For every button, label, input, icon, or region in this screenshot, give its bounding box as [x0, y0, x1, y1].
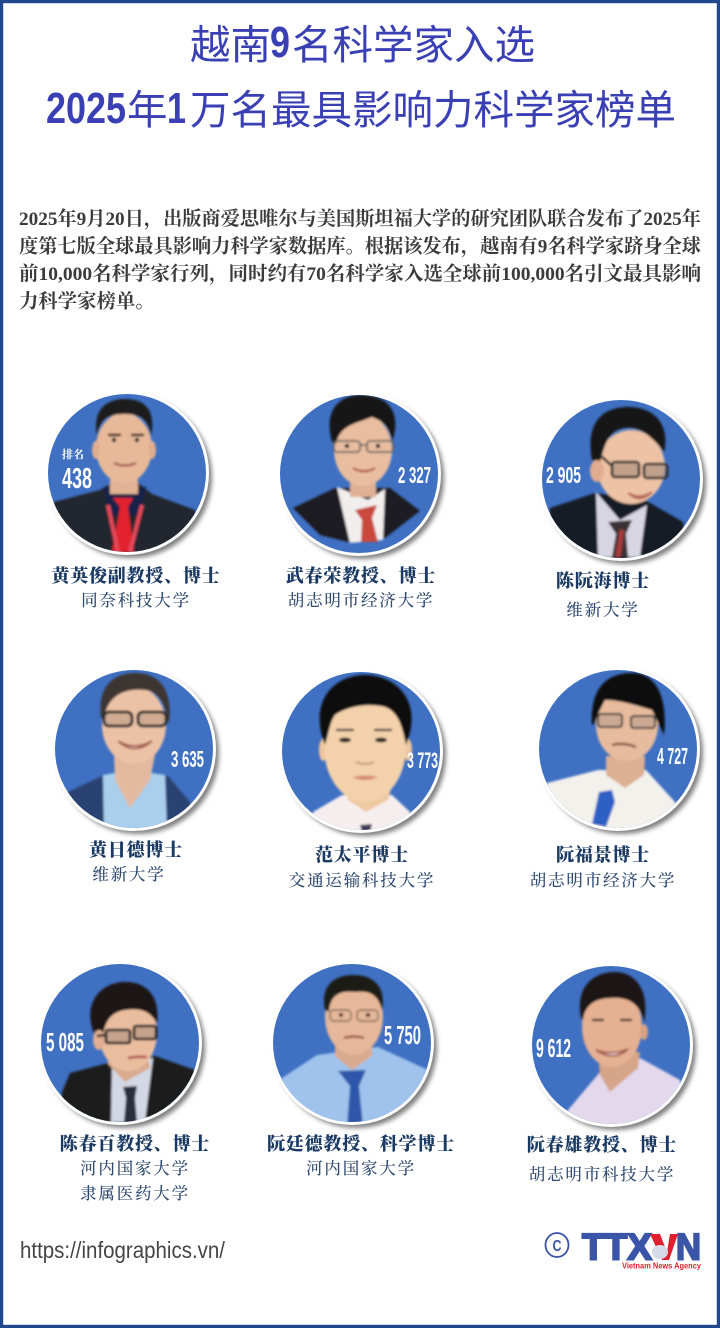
logo tagline: Vietnam News Agency [622, 1260, 701, 1270]
title [46, 18, 676, 133]
title: 名科学家入选 [292, 22, 535, 68]
rank number: 3 773 [407, 748, 438, 773]
scientist 4 name: 黄日德博士 [89, 839, 183, 860]
scientist 2 portrait [277, 392, 444, 559]
title: 2025 [46, 84, 126, 133]
scientist 8 portrait [270, 961, 437, 1130]
intro text block: 前10,000名科学家行列，同时约有70名科学家入选全球前100,000名引文最具影响 [19, 262, 701, 285]
scientist 3 portrait [539, 397, 706, 570]
title: 年 [127, 87, 168, 133]
intro text block [19, 207, 702, 312]
logo wordmark: N [676, 1226, 701, 1268]
rank number: 5 750 [384, 1020, 421, 1050]
scientist 7 university lines [80, 1159, 190, 1203]
rank number: 2 327 [398, 462, 431, 488]
title: 1 [167, 84, 186, 133]
logo wordmark [582, 1226, 701, 1268]
scientist 5 university: 交通运输科技大学 [289, 871, 435, 890]
scientist 1 name: 黄英俊副教授、博士 [51, 565, 221, 586]
rank number: 438 [62, 463, 92, 495]
scientist 6 name: 阮福景博士 [556, 844, 650, 865]
scientist 5 portrait [279, 669, 446, 840]
title: 越南 [190, 22, 271, 68]
scientist 9 university: 胡志明市科技大学 [529, 1165, 675, 1184]
scientist 7 university lines: 隶属医药大学 [80, 1184, 190, 1203]
scientist 7 name: 陈春百教授、博士 [60, 1133, 210, 1154]
scientist 3 name: 陈阮海博士 [556, 570, 650, 591]
scientist 9 name: 阮春雄教授、博士 [527, 1134, 677, 1155]
rank label: 排名 [62, 447, 84, 461]
scientist 6 portrait [536, 667, 703, 840]
scientist 6 university: 胡志明市经济大学 [530, 871, 676, 890]
source url: https://infographics.vn/ [20, 1237, 226, 1263]
scientist 1 university: 同奈科技大学 [81, 591, 191, 610]
logo: TTXVN [546, 1226, 701, 1270]
intro text block: 度第七版全球最具影响力科学家数据库。根据该发布，越南有9名科学家跻身全球 [19, 234, 702, 258]
scientist 9 portrait [529, 963, 696, 1130]
scientist 8 university: 河内国家大学 [306, 1159, 416, 1178]
rank number: 5 085 [46, 1027, 84, 1057]
icon: copyright: C [552, 1238, 562, 1255]
scientist 7 portrait [38, 961, 205, 1130]
intro text block: 力科学家榜单。 [19, 290, 155, 312]
scientist 8 name: 阮廷德教授、科学博士 [267, 1133, 455, 1154]
scientist 3 university: 维新大学 [566, 600, 640, 620]
scientist 4 portrait [52, 667, 219, 840]
rank number: 9 612 [536, 1033, 571, 1063]
title: 万名最具影响力科学家榜单 [190, 87, 676, 133]
intro text block: 2025年9月20日，出版商爱思唯尔与美国斯坦福大学的研究团队联合发布了2025年 [19, 207, 701, 230]
rank number: 2 905 [546, 462, 581, 488]
rank number: 3 635 [171, 746, 204, 772]
rank number: 4 727 [657, 743, 688, 769]
scientist 2 university: 胡志明市经济大学 [288, 591, 434, 610]
scientist 1 portrait [45, 391, 212, 560]
icon: copyright [546, 1233, 568, 1257]
logo wordmark: TTX [582, 1226, 652, 1268]
scientist 5 name: 范太平博士 [315, 844, 409, 865]
title: 9 [270, 18, 290, 67]
scientist 4 university: 维新大学 [92, 865, 166, 884]
scientist 7 university lines: 河内国家大学 [80, 1159, 190, 1178]
scientist 2 name: 武春荣教授、博士 [286, 565, 436, 586]
